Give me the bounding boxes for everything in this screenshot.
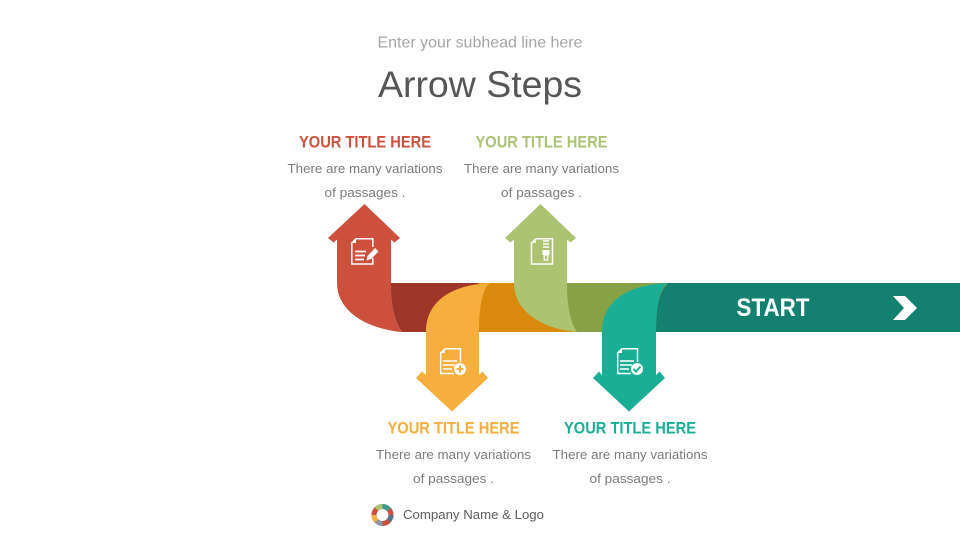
- text block: green step: of passages .: [501, 185, 582, 200]
- arrow: red step up: [328, 204, 402, 332]
- text block: orange step: [376, 418, 532, 486]
- text block: green step: YOUR TITLE HERE: [476, 132, 608, 152]
- text block: red step: YOUR TITLE HERE: [299, 132, 431, 152]
- company name: Company Name & Logo: [403, 507, 544, 522]
- text block: teal step: of passages .: [590, 471, 670, 486]
- icon: zip document: [532, 239, 552, 264]
- text block: orange step: YOUR TITLE HERE: [388, 418, 520, 438]
- text block: red step: of passages .: [324, 185, 406, 200]
- band: dark red segment: [390, 283, 491, 332]
- arrow: green step up: [505, 204, 577, 332]
- label: start: START: [736, 294, 810, 322]
- text block: teal step: [552, 418, 708, 486]
- icon: document with check: [618, 349, 643, 375]
- text block: orange step: of passages .: [413, 471, 494, 486]
- text block: green step: [464, 132, 620, 200]
- text block: teal step: There are many variations: [552, 447, 708, 462]
- band: dark orange segment: [478, 283, 578, 332]
- text block: red step: [288, 132, 443, 200]
- band: dark teal start bar: [656, 283, 960, 332]
- icon: document with pencil: [352, 239, 378, 264]
- arrow: orange step down: [416, 283, 490, 412]
- icon: chevron: [893, 296, 917, 320]
- subhead: Enter your subhead line here: [378, 34, 583, 52]
- text block: orange step: There are many variations: [376, 447, 532, 462]
- text block: green step: There are many variations: [464, 161, 620, 176]
- text block: teal step: YOUR TITLE HERE: [564, 418, 696, 438]
- icon: document with plus: [441, 349, 466, 375]
- logo: multicoloured ring: [374, 506, 391, 524]
- title: Arrow Steps: [378, 64, 582, 105]
- text block: red step: There are many variations: [288, 161, 443, 176]
- arrow: teal step down: [593, 283, 667, 412]
- band: olive segment: [566, 283, 668, 332]
